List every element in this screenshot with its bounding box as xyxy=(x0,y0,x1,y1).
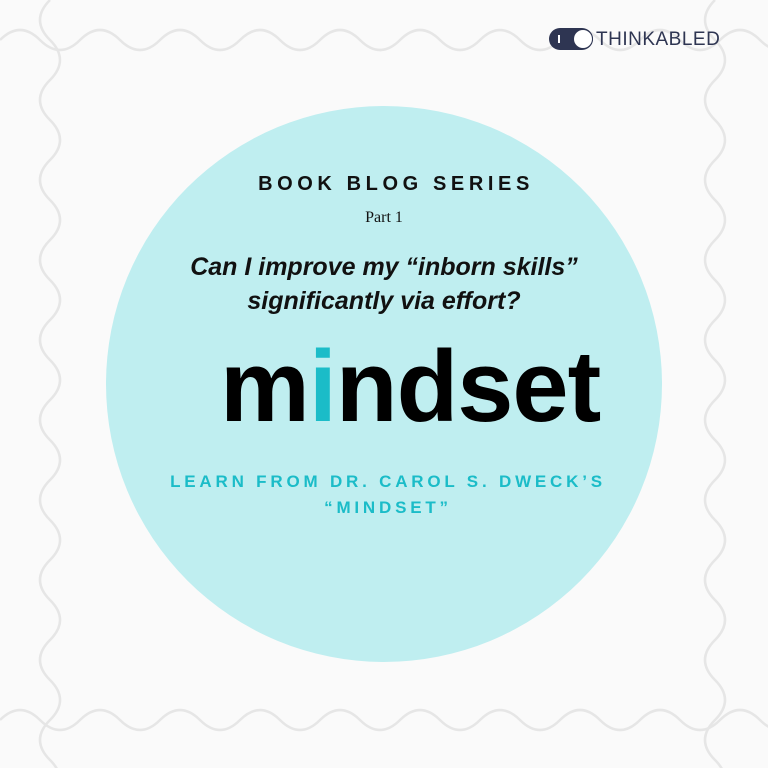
teal callout: LEARN FROM DR. CAROL S. DWECK’S xyxy=(170,472,606,491)
teal callout xyxy=(170,472,606,517)
heading: BOOK BLOG SERIES xyxy=(258,173,534,195)
question xyxy=(190,253,578,315)
mindset word: mindset xyxy=(220,331,600,443)
logo xyxy=(549,28,720,50)
subheading: Part 1 xyxy=(365,209,403,226)
icon: toggle xyxy=(549,28,593,50)
question: Can I improve my “inborn skills” xyxy=(190,253,578,281)
question: significantly via effort? xyxy=(247,287,521,315)
teal callout: “MINDSET” xyxy=(324,498,452,517)
logo text: THINKABLED xyxy=(596,29,720,50)
circle xyxy=(106,106,662,662)
